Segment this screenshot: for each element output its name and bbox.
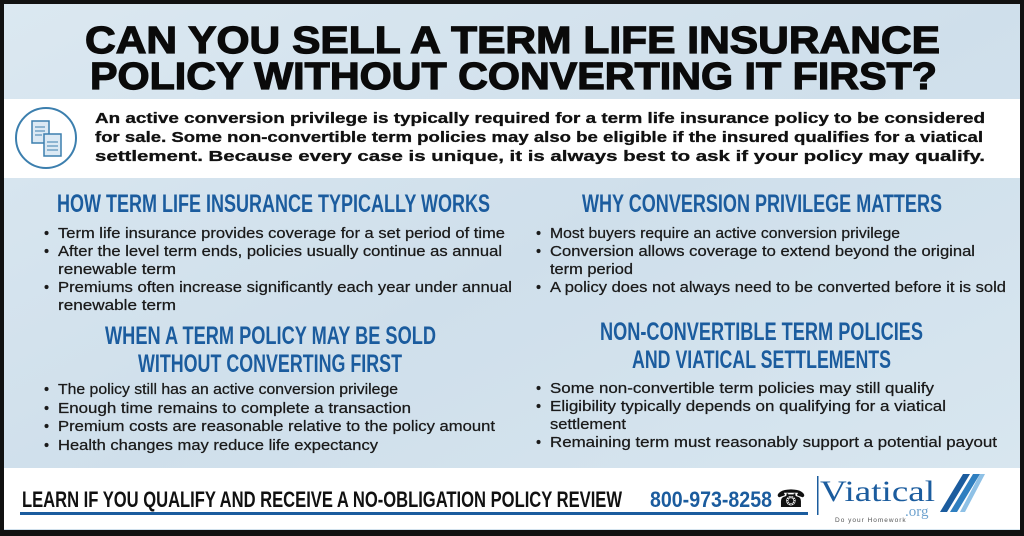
intro text: settlement. Because every case is unique, it is always best to ask if your policy may qualify. [95, 148, 985, 165]
title: POLICY WITHOUT CONVERTING IT FIRST? [90, 56, 937, 98]
intro band [4, 99, 1020, 178]
heading [600, 318, 923, 374]
panel: non-convertible term policies: Some non-convertible term policies may still qualify [550, 381, 935, 397]
intro text: for sale. Some non-convertible term policies may also be eligible if the insured qualifies for a viatical [95, 129, 983, 146]
panel: how term life works: Term life insurance provides coverage for a set period of time [58, 226, 505, 242]
panel: when a term policy may be sold: Premium costs are reasonable relative to the policy amount [58, 419, 495, 435]
panel: how term life works [44, 190, 512, 314]
panel: non-convertible term policies: • [536, 399, 541, 415]
panel: non-convertible term policies: Eligibility typically depends on qualifying for a viatical [550, 399, 946, 415]
panel: why conversion privilege matters: • [536, 226, 541, 242]
panel: why conversion privilege matters [536, 190, 1006, 296]
panel: when a term policy may be sold: • [44, 382, 49, 398]
panel: how term life works: After the level term ends, policies usually continue as annual [58, 244, 502, 260]
panel: when a term policy may be sold: • [44, 438, 49, 454]
heading: WHEN A TERM POLICY MAY BE SOLD [105, 322, 436, 350]
icon: documents [16, 108, 76, 168]
logo: Viatical [820, 475, 935, 508]
logo: .org [905, 504, 929, 520]
heading: HOW TERM LIFE INSURANCE TYPICALLY WORKS [57, 190, 490, 218]
footer [4, 468, 1020, 529]
panel: when a term policy may be sold: • [44, 419, 49, 435]
phone number: 800-973-8258 [650, 487, 772, 512]
panel: when a term policy may be sold: The policy still has an active conversion privilege [58, 382, 398, 398]
title: CAN YOU SELL A TERM LIFE INSURANCE [85, 20, 940, 62]
intro text: An active conversion privilege is typically required for a term life insurance policy to be considered [95, 110, 985, 127]
icon: telephone: ☎ [776, 485, 806, 513]
panel: when a term policy may be sold: Enough time remains to complete a transaction [58, 401, 411, 417]
panel: non-convertible term policies: • [536, 381, 541, 397]
call to action: LEARN IF YOU QUALIFY AND RECEIVE A NO-OBLIGATION POLICY REVIEW [22, 487, 622, 512]
panel: why conversion privilege matters: Most buyers require an active conversion privilege [550, 226, 900, 242]
heading: AND VIATICAL SETTLEMENTS [632, 346, 891, 374]
logo [817, 474, 985, 524]
panel: non-convertible term policies [536, 318, 997, 451]
heading: WITHOUT CONVERTING FIRST [138, 350, 402, 378]
panel: how term life works: • [44, 226, 49, 242]
panel: why conversion privilege matters: • [536, 280, 541, 296]
panel: how term life works: renewable term [58, 262, 176, 278]
panel: why conversion privilege matters: term period [550, 262, 633, 278]
panel: non-convertible term policies: • [536, 435, 541, 451]
panel: why conversion privilege matters: A policy does not always need to be converted before it is sold [550, 280, 1006, 296]
panel: why conversion privilege matters: Conversion allows coverage to extend beyond the original [550, 244, 975, 260]
panel: when a term policy may be sold: • [44, 401, 49, 417]
panel: non-convertible term policies: Remaining term must reasonably support a potential payout [550, 435, 997, 451]
logo: Do your Homework [835, 517, 907, 524]
title [85, 20, 940, 98]
panel: how term life works: • [44, 244, 49, 260]
panel: when a term policy may be sold [44, 322, 495, 454]
panel: when a term policy may be sold: Health changes may reduce life expectancy [58, 438, 379, 454]
intro text [95, 110, 985, 165]
panel: how term life works: renewable term [58, 298, 176, 314]
panel: how term life works: Premiums often increase significantly each year under annual [58, 280, 512, 296]
panel: how term life works: • [44, 280, 49, 296]
panel: non-convertible term policies: settlement [550, 417, 626, 433]
heading [105, 322, 436, 378]
panel: why conversion privilege matters: • [536, 244, 541, 260]
